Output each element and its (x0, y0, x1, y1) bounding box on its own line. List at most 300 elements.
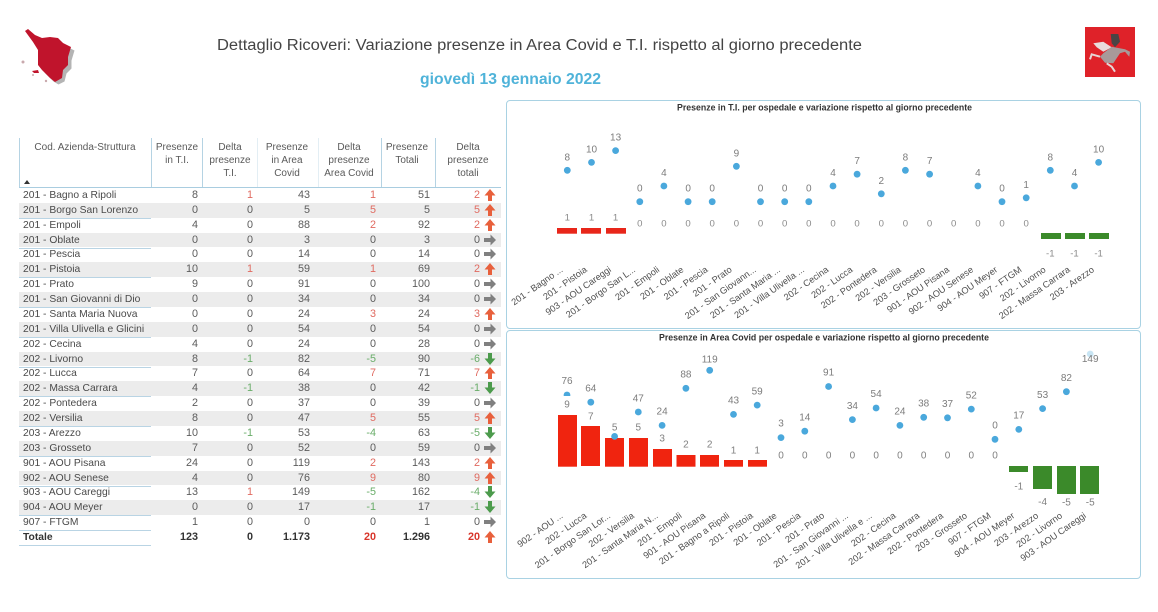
x axis labels: 202 - Lucca (543, 510, 589, 546)
x axis labels: 202 - Pontedera (885, 510, 946, 556)
row: 202 - Versilia: 47 (298, 412, 310, 424)
x axis labels: 202 - Lucca (809, 264, 855, 300)
value labels: variation: 0 (873, 450, 879, 461)
row: 203 - Arezzo: -4 (366, 427, 376, 439)
row: Totale (19, 531, 496, 546)
row: 904 - AOU Meyer: 17 (298, 501, 310, 513)
x axis labels: 202 - Pontedera (819, 264, 879, 310)
value labels: presenze in Area Covid: 47 (633, 393, 644, 404)
value labels: variation: 0 (830, 218, 836, 229)
value labels: variation: 1 (731, 446, 737, 457)
value labels: variation: 0 (637, 218, 642, 229)
row: 201 - Empoli (23, 219, 496, 231)
x axis labels: 201 - Pescia (662, 264, 710, 302)
row: 904 - AOU Meyer: -1 (470, 501, 480, 513)
value labels: variation: 2 (683, 439, 689, 450)
row: 201 - San Giovanni di Dio: 34 (418, 293, 430, 305)
icon: Regione Toscana flag with pegasus (1085, 27, 1135, 77)
value labels: variation: 0 (1024, 218, 1029, 229)
value labels: variation: -1 (1046, 248, 1055, 259)
row: 202 - Cecina (23, 338, 496, 350)
value labels: variation: 1 (589, 212, 594, 223)
row: 202 - Cecina: 0 (247, 338, 253, 350)
row: 903 - AOU Careggi: 13 (186, 486, 198, 498)
row: 203 - Grosseto (19, 441, 501, 456)
value labels: presenze in Area Covid: 82 (1061, 373, 1072, 384)
x axis labels: 201 - Bagno a Ripoli (657, 510, 731, 566)
row: 202 - Massa Carrara: 202 - Massa Carrara (23, 383, 117, 394)
value labels: variation: 0 (685, 218, 691, 229)
header: Presenze in Area Covid: Presenze (266, 142, 308, 153)
row: 201 - Bagno a Ripoli (23, 189, 496, 201)
row: 203 - Grosseto: 7 (192, 442, 198, 454)
x axis labels: 202 - Livorno (1014, 510, 1064, 549)
row: 901 - AOU Pisana: 2 (474, 457, 480, 469)
row: 901 - AOU Pisana: 0 (247, 457, 253, 469)
x axis labels: 201 - San Giovann... (683, 264, 758, 321)
value labels: variation: 9 (564, 399, 570, 410)
value labels: variation: -4 (1038, 497, 1047, 508)
row: 901 - AOU Pisana (23, 457, 496, 469)
row: 201 - Borgo San Lorenzo: 201 - Borgo San Lorenzo (23, 205, 138, 216)
bars: daily variation (557, 228, 1109, 239)
value labels: presenze in T.I.: 4 (661, 168, 667, 179)
header: Presenze in T.I.: Presenze (156, 142, 198, 153)
row: 201 - Santa Maria Nuova (23, 308, 496, 320)
value labels: variation: 0 (826, 450, 832, 461)
row: 202 - Versilia: 202 - Versilia (23, 413, 83, 424)
x axis labels: 907 - FTGM (946, 510, 993, 547)
row: 201 - Bagno a Ripoli: 8 (192, 189, 198, 201)
row: 907 - FTGM: 907 - FTGM (23, 517, 78, 528)
value labels: variation: -1 (1094, 248, 1103, 259)
row: 907 - FTGM: 0 (247, 516, 253, 528)
row: 202 - Pontedera: 2 (192, 397, 198, 409)
row: 902 - AOU Senese: 80 (418, 472, 430, 484)
sort indicator (24, 180, 30, 184)
x axis labels: 203 - Grosseto (913, 510, 969, 554)
row: 203 - Arezzo: -1 (243, 427, 253, 439)
row: 201 - Santa Maria Nuova: 201 - Santa Maria Nuova (23, 309, 137, 320)
value labels: variation: 0 (927, 218, 932, 229)
row: 201 - Pescia: 14 (418, 248, 430, 260)
x axis labels: 202 - Cecina (849, 510, 898, 549)
row: 902 - AOU Senese: 902 - AOU Senese (23, 473, 109, 484)
table: hospital admissions (19, 138, 501, 546)
row: 202 - Lucca: 71 (418, 367, 430, 379)
value labels: presenze in Area Covid: 37 (942, 399, 953, 410)
row: 201 - Villa Ulivella e Glicini: 201 - Villa Ulivella e Glicini (23, 324, 144, 335)
row: 201 - Oblate: 3 (424, 234, 430, 246)
row: 201 - Prato: 9 (192, 278, 198, 290)
header: Presenze Totali: Presenze (386, 142, 428, 153)
row: 201 - Pescia: 0 (247, 248, 253, 260)
row: 201 - San Giovanni di Dio: 0 (370, 293, 376, 305)
row: 201 - Empoli: 2 (474, 219, 480, 231)
row: 904 - AOU Meyer: 904 - AOU Meyer (23, 502, 103, 513)
header: Delta presenze Area Covid: presenze (328, 155, 370, 166)
x axis labels: 201 - Santa Maria ... (708, 264, 782, 320)
row: 201 - Prato: 0 (474, 278, 480, 290)
row: 201 - Pistoia: 1 (247, 263, 253, 275)
row: 904 - AOU Meyer: -1 (366, 501, 376, 513)
row: 201 - Pistoia: 201 - Pistoia (23, 264, 80, 275)
x axis labels: 202 - Versilia (853, 264, 903, 303)
row: 202 - Livorno: -1 (243, 353, 253, 365)
row: 202 - Massa Carrara (19, 381, 501, 396)
value labels: presenze in Area Covid: 59 (752, 386, 763, 397)
row: 203 - Arezzo: 63 (418, 427, 430, 439)
row: 201 - Oblate: 3 (304, 234, 310, 246)
x axis labels: 203 - Grosseto (871, 264, 927, 308)
row: 203 - Arezzo: 53 (298, 427, 310, 439)
row: 201 - Santa Maria Nuova: 3 (474, 308, 480, 320)
value labels: variation: 5 (612, 422, 618, 433)
row: 201 - Borgo San Lorenzo: 0 (247, 204, 253, 216)
row: 907 - FTGM: 0 (304, 516, 310, 528)
value labels: variation: 0 (999, 218, 1005, 229)
row: 201 - Bagno a Ripoli: 1 (370, 189, 376, 201)
row: 201 - Borgo San Lorenzo: 5 (370, 204, 376, 216)
row: 201 - Santa Maria Nuova: 3 (370, 308, 376, 320)
row: 201 - San Giovanni di Dio: 0 (247, 293, 253, 305)
x axis labels (515, 510, 1088, 571)
value labels: variation: 2 (707, 439, 713, 450)
value labels: presenze in T.I.: 4 (975, 168, 981, 179)
value labels: presenze in T.I.: 0 (685, 184, 691, 195)
row: Totale: 123 (180, 531, 198, 543)
x axis labels: 902 - AOU ... (515, 510, 565, 549)
row: 901 - AOU Pisana: 119 (293, 457, 310, 469)
row: 201 - Villa Ulivella e Glicini: 0 (192, 323, 198, 335)
row: 907 - FTGM: 0 (474, 516, 480, 528)
row: 202 - Lucca: 0 (247, 367, 253, 379)
row: 201 - Empoli: 92 (418, 219, 430, 231)
x axis labels: 203 - Arezzo (992, 510, 1040, 548)
row: 202 - Cecina: 28 (418, 338, 430, 350)
row: 201 - Pescia: 0 (474, 248, 480, 260)
row: 901 - AOU Pisana: 901 - AOU Pisana (23, 458, 105, 469)
value labels: variation: 0 (854, 218, 860, 229)
value labels: presenze in T.I.: 7 (927, 156, 933, 167)
row: 202 - Cecina: 202 - Cecina (23, 339, 81, 350)
row: 202 - Massa Carrara: -1 (470, 382, 480, 394)
x axis labels: 202 - Massa Carrara (997, 264, 1073, 321)
value labels: presenze in T.I.: 9 (734, 148, 740, 159)
value labels: variation: 0 (945, 450, 951, 461)
x axis labels: 201 - Empoli (636, 510, 684, 548)
row: 201 - San Giovanni di Dio: 0 (192, 293, 198, 305)
value labels: variation: 0 (734, 218, 739, 229)
row: 201 - Borgo San Lorenzo: 5 (304, 204, 310, 216)
row: 907 - FTGM: 1 (192, 516, 198, 528)
value labels: presenze in T.I.: 8 (903, 152, 909, 163)
row: 201 - Pescia: 0 (192, 248, 198, 260)
value labels: variation: 0 (758, 218, 763, 229)
row: 903 - AOU Careggi: -4 (470, 486, 480, 498)
row: 203 - Arezzo: 10 (186, 427, 198, 439)
value labels: variation: 0 (778, 450, 784, 461)
x axis labels: 201 - Pistoia (541, 264, 590, 302)
row: 203 - Arezzo: -5 (470, 427, 480, 439)
value labels: variation: 0 (710, 218, 715, 229)
header: Delta presenze T.I.: presenze (209, 155, 251, 166)
row: 903 - AOU Careggi (23, 486, 496, 498)
row: 202 - Lucca: 7 (192, 367, 198, 379)
header: Delta presenze totali: totali (457, 168, 479, 179)
row: 201 - Empoli: 88 (298, 219, 310, 231)
row: 201 - Prato: 0 (370, 278, 376, 290)
row: 201 - Borgo San Lorenzo (19, 203, 501, 218)
row: 202 - Cecina: 0 (474, 338, 480, 350)
row: 903 - AOU Careggi: 903 - AOU Careggi (23, 487, 110, 498)
value labels: variation: 0 (903, 218, 908, 229)
row: 907 - FTGM: 1 (424, 516, 430, 528)
row: 201 - Pistoia: 59 (298, 263, 310, 275)
value labels: variation: 0 (975, 218, 981, 229)
value labels: variation: 0 (782, 218, 787, 229)
x axis labels: 201 - Villa Ulivella ... (732, 264, 806, 320)
row: 904 - AOU Meyer: 17 (418, 501, 430, 513)
row: 202 - Massa Carrara: 38 (298, 382, 310, 394)
row: 901 - AOU Pisana: 143 (412, 457, 430, 469)
row: 203 - Arezzo: 203 - Arezzo (23, 428, 81, 439)
row: 202 - Pontedera: 37 (298, 397, 310, 409)
chart title: Presenze in Area Covid per ospedale e variazione rispetto al giorno precedente (659, 332, 989, 342)
value labels: presenze in T.I.: 0 (758, 184, 764, 195)
value labels: presenze in T.I.: 0 (709, 184, 715, 195)
row: 202 - Livorno: 8 (192, 353, 198, 365)
row: 201 - San Giovanni di Dio (19, 292, 501, 307)
row: 902 - AOU Senese: 4 (192, 472, 198, 484)
header: Presenze Totali: Totali (395, 155, 419, 166)
row: 202 - Pontedera: 0 (247, 397, 253, 409)
header: Delta presenze Area Covid (324, 142, 374, 179)
row: 201 - Villa Ulivella e Glicini: 54 (298, 323, 310, 335)
row: 202 - Pontedera: 0 (370, 397, 376, 409)
value labels: variation: 0 (661, 218, 667, 229)
row: 201 - Borgo San Lorenzo: 5 (424, 204, 430, 216)
value labels: variation: 1 (754, 446, 760, 457)
value labels: presenze in T.I.: 8 (1048, 152, 1054, 163)
row: 201 - San Giovanni di Dio: 201 - San Giovanni di Dio (23, 294, 140, 305)
value labels: variation: 1 (613, 212, 618, 223)
value labels: presenze in Area Covid: 64 (585, 384, 597, 394)
row: 203 - Arezzo (23, 427, 496, 439)
value labels: presenze in T.I.: 0 (999, 184, 1005, 195)
row: 201 - Empoli: 2 (370, 219, 376, 231)
value labels: presenze in T.I. (565, 133, 1105, 195)
row: 201 - Prato: 0 (247, 278, 253, 290)
row: 201 - Bagno a Ripoli: 1 (247, 189, 253, 201)
row: 201 - Villa Ulivella e Glicini: 0 (247, 323, 253, 335)
row: 201 - Pescia: 14 (298, 248, 310, 260)
value labels: presenze in T.I.: 0 (637, 184, 643, 195)
row: 201 - Pistoia: 1 (370, 263, 376, 275)
row: 201 - Oblate (19, 233, 501, 247)
x axis labels: 907 - FTGM (977, 264, 1024, 301)
row: 201 - Bagno a Ripoli: 43 (298, 189, 310, 201)
x axis labels: 201 - Oblate (638, 264, 685, 302)
x axis labels: 201 - Borgo San L... (564, 264, 637, 320)
row: 203 - Grosseto: 203 - Grosseto (23, 443, 91, 454)
value labels: presenze in Area Covid: 3 (778, 419, 784, 430)
row: 202 - Livorno: -6 (470, 353, 480, 365)
header: Presenze in Area Covid: in Area (271, 155, 303, 166)
value labels: variation: 7 (588, 412, 594, 423)
row: 903 - AOU Careggi: 149 (292, 486, 310, 498)
row: 202 - Pontedera: 0 (474, 397, 480, 409)
value labels: variation: 0 (992, 450, 998, 461)
row: 201 - Santa Maria Nuova: 0 (247, 308, 253, 320)
value labels: presenze in T.I.: 4 (1072, 168, 1078, 179)
row: 202 - Massa Carrara: -1 (243, 382, 253, 394)
row: 202 - Livorno (19, 352, 501, 366)
row: 202 - Livorno: 90 (418, 353, 430, 365)
row: Totale: 1.296 (403, 531, 430, 543)
x axis labels: 201 - Borgo San Lor... (533, 510, 612, 570)
value labels: variation: 3 (659, 433, 665, 444)
row: 904 - AOU Meyer: 0 (247, 501, 253, 513)
x axis labels: 201 - Pescia (755, 510, 803, 548)
x axis labels (510, 264, 1096, 321)
row: Totale: 1.173 (283, 531, 310, 543)
row: 201 - Pistoia: 69 (418, 263, 430, 275)
x axis labels: 901 - AOU Pisana (641, 510, 708, 561)
value labels: presenze in Area Covid: 149 (1082, 354, 1099, 365)
row: 202 - Massa Carrara: 0 (370, 382, 376, 394)
row: 203 - Grosseto: 0 (474, 442, 480, 454)
row: 202 - Versilia: 0 (247, 412, 253, 424)
x axis labels: 201 - Santa Maria N... (580, 510, 660, 570)
row: 201 - Villa Ulivella e Glicini: 0 (474, 323, 480, 335)
x axis labels: 201 - Oblate (731, 510, 779, 548)
x axis labels: 201 - Bagno ... (510, 264, 565, 307)
value labels: presenze in Area Covid: 0 (992, 420, 998, 432)
row: 201 - Santa Maria Nuova: 24 (298, 308, 310, 320)
x axis labels: 903 - AOU Careggi (544, 264, 613, 317)
x axis labels: 902 - AOU Senese (907, 264, 975, 317)
dot over bar: 201 - Borgo San Lorenzo (611, 433, 618, 440)
value labels: variation: -1 (1070, 248, 1079, 259)
value labels: presenze in T.I.: 0 (806, 184, 812, 195)
row: 201 - Santa Maria Nuova: 0 (192, 308, 198, 320)
row: 201 - Bagno a Ripoli: 201 - Bagno a Ripoli (23, 190, 116, 201)
row: Totale: Totale (23, 532, 53, 543)
value labels: variation: 0 (806, 218, 811, 229)
row: 201 - Empoli: 0 (247, 219, 253, 231)
row: 201 - Pistoia: 2 (474, 263, 480, 275)
x axis labels: 202 - Versilia (587, 510, 637, 549)
header: Delta presenze T.I.: T.I. (223, 168, 237, 179)
value labels: presenze in T.I.: 13 (610, 133, 622, 144)
value labels: variation: -5 (1086, 497, 1095, 508)
row: 903 - AOU Careggi: 1 (247, 486, 253, 498)
row: 202 - Versilia: 8 (192, 412, 198, 424)
row: 902 - AOU Senese: 9 (474, 472, 480, 484)
value labels: presenze in T.I.: 2 (879, 176, 885, 187)
value labels: presenze in T.I.: 1 (1023, 180, 1029, 191)
value labels: presenze in Area Covid: 53 (1037, 390, 1049, 401)
value labels: variation: -5 (1062, 497, 1071, 508)
x axis labels: 202 - Livorno (998, 264, 1048, 303)
title: Dettaglio Ricoveri: Variazione presenze in Area Covid e T.I. rispetto al giorno precedente (217, 37, 862, 54)
value labels: variation: -1 (1014, 481, 1024, 492)
value labels: presenze in Area Covid (561, 354, 1099, 432)
row: 201 - Borgo San Lorenzo: 0 (192, 204, 198, 216)
value labels: variation: 0 (951, 218, 956, 229)
value labels: presenze in T.I.: 4 (830, 168, 836, 179)
date subtitle: giovedì 13 gennaio 2022 (420, 71, 601, 88)
value labels: presenze in T.I.: 10 (586, 144, 597, 155)
row: 202 - Pontedera (23, 397, 496, 409)
row: 202 - Cecina: 24 (298, 338, 310, 350)
x axis labels: 201 - Pistoia (707, 510, 756, 548)
row: 201 - Oblate: 0 (247, 234, 253, 246)
x axis labels: 202 - Cecina (782, 264, 831, 303)
value labels: variation: 0 (802, 450, 808, 461)
value labels: presenze in T.I.: 0 (782, 184, 788, 195)
value labels: presenze in Area Covid: 38 (918, 398, 930, 410)
row: 902 - AOU Senese: 76 (298, 472, 310, 484)
row: 201 - Santa Maria Nuova: 24 (418, 308, 430, 320)
row: 202 - Massa Carrara: 4 (192, 382, 198, 394)
value labels: variation (564, 399, 1095, 508)
value labels: variation: 1 (565, 212, 570, 223)
header: Presenze in T.I.: in T.I. (165, 155, 189, 166)
row: Totale: 0 (247, 531, 253, 543)
row: 201 - Oblate: 0 (192, 234, 198, 246)
row: 202 - Cecina: 0 (370, 338, 376, 350)
panel: presenze in Area Covid chart (506, 330, 1141, 579)
row: 201 - Pescia: 0 (370, 248, 376, 260)
row: 201 - Borgo San Lorenzo: 5 (474, 204, 480, 216)
row: 202 - Pontedera: 202 - Pontedera (23, 398, 97, 409)
row: 907 - FTGM (19, 516, 496, 531)
value labels: presenze in T.I.: 7 (854, 156, 860, 167)
row: 901 - AOU Pisana: 24 (186, 457, 198, 469)
row: 201 - Villa Ulivella e Glicini: 54 (418, 323, 430, 335)
value labels: presenze in Area Covid: 88 (680, 370, 692, 380)
x axis labels: 901 - AOU Pisana (885, 264, 952, 315)
x axis labels: 201 - San Giovanni ... (772, 510, 850, 570)
x axis labels: 201 - Empoli (613, 264, 661, 302)
x axis labels: 904 - AOU Meyer (935, 264, 999, 313)
row: 202 - Pontedera: 39 (418, 397, 430, 409)
dots: presenze in T.I. (564, 147, 1102, 205)
row: 202 - Lucca: 202 - Lucca (23, 368, 77, 379)
value labels: presenze in Area Covid: 43 (728, 396, 739, 407)
value labels: variation (565, 212, 1103, 259)
header: Delta presenze totali: Delta (456, 142, 480, 153)
row: 201 - Oblate: 0 (474, 234, 480, 246)
row: 201 - Prato: 100 (412, 278, 430, 290)
row: 201 - San Giovanni di Dio: 0 (474, 293, 480, 305)
dots: presenze in Area Covid (560, 351, 1094, 443)
row: 202 - Lucca: 7 (370, 367, 376, 379)
value labels: variation: 0 (921, 450, 927, 461)
value labels: presenze in Area Covid: 24 (657, 406, 668, 418)
header: Delta presenze totali: presenze (447, 155, 489, 166)
row: 202 - Livorno: 202 - Livorno (23, 354, 83, 365)
header: Delta presenze T.I.: Delta (218, 142, 242, 153)
x axis labels: 201 - Prato (691, 264, 734, 299)
row: 201 - Pistoia: 10 (186, 263, 198, 275)
row: 203 - Grosseto: 0 (247, 442, 253, 454)
row: 201 - Bagno a Ripoli: 51 (418, 189, 430, 201)
row: 203 - Grosseto: 59 (418, 442, 430, 454)
row: 201 - Pistoia (19, 262, 501, 277)
